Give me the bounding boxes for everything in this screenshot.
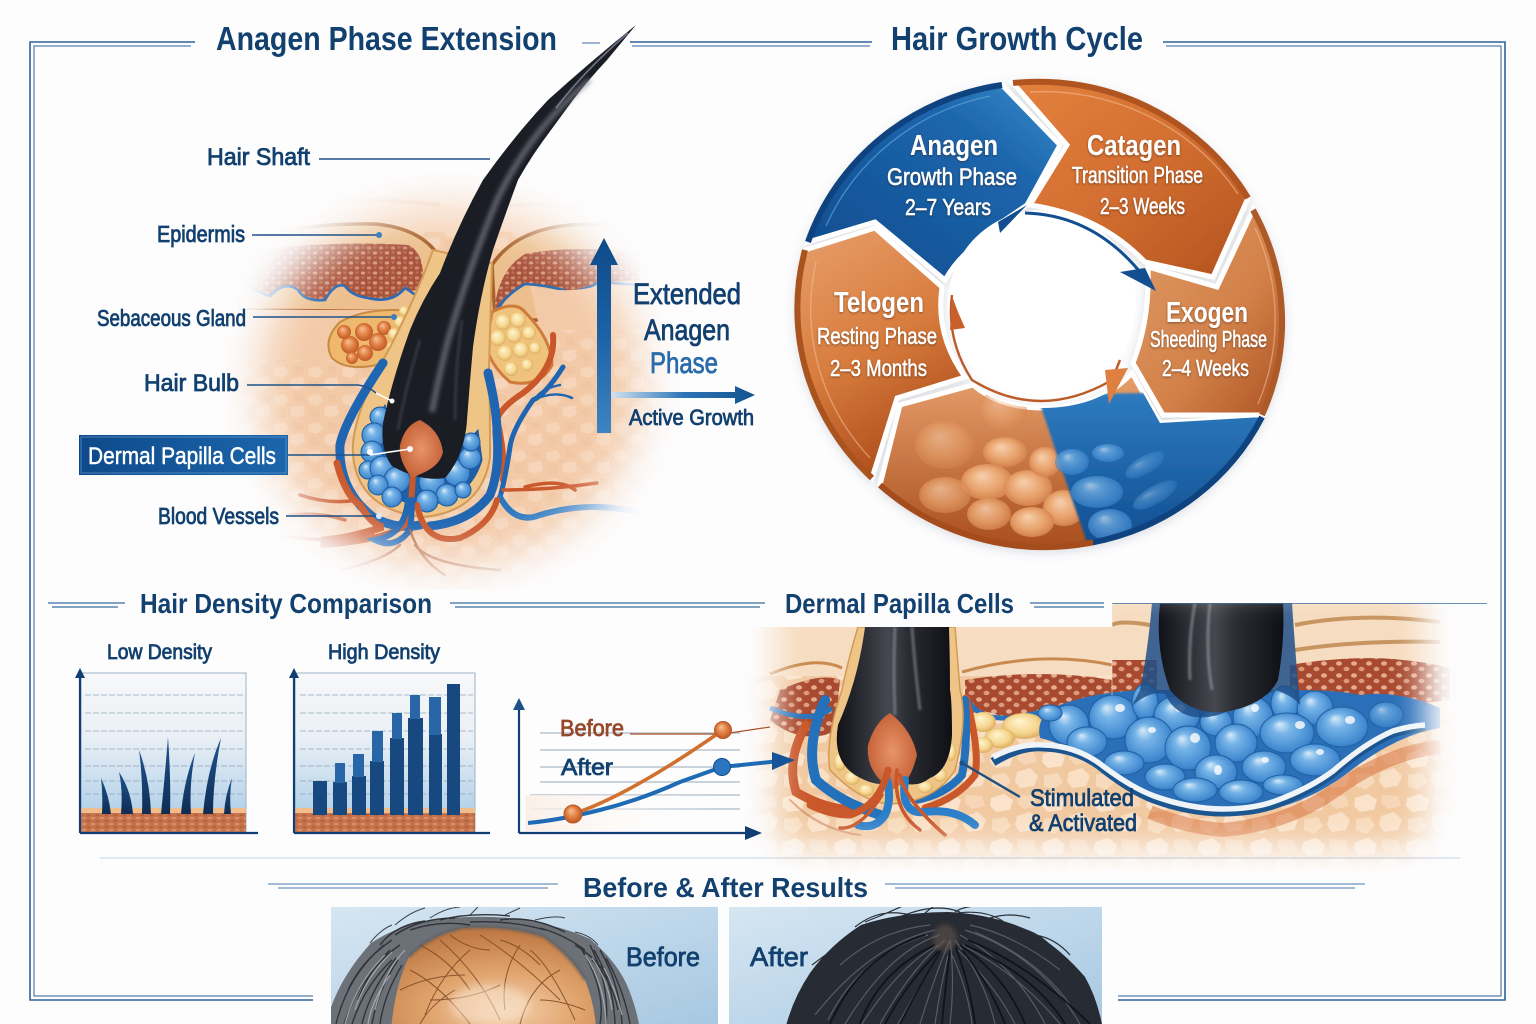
text: Exogen phase: Exogen <box>1166 297 1248 329</box>
text: Exogen phase: Sheeding Phase <box>1150 326 1267 352</box>
text: Exogen phase <box>1150 297 1267 381</box>
segment: Catagen <box>1013 82 1248 277</box>
text: Anagen phase <box>887 130 1017 220</box>
chart: before and after line chart <box>513 698 795 840</box>
left root strands <box>790 770 975 835</box>
chart: Low Density: Low Density <box>107 641 212 664</box>
text: Telogen phase <box>817 287 937 381</box>
text: Catagen phase: 2–3 Weeks <box>1100 193 1185 219</box>
photo: before <box>325 907 718 1024</box>
inner arrows <box>950 205 1156 404</box>
section heading: Before & After Results: Before & After Results <box>583 872 868 903</box>
chart: High Density: High Density <box>328 641 440 664</box>
arrow: active growth horizontal <box>612 386 755 404</box>
section heading: Hair Density Comparison: Hair Density Comparison <box>140 588 432 619</box>
ring outer rims <box>797 82 1282 547</box>
inset tissue lower <box>1150 747 1440 830</box>
text: Anagen phase: Growth Phase <box>887 164 1017 191</box>
ring centre <box>948 210 1136 398</box>
text: Extended Anagen Phase: Extended <box>633 278 741 311</box>
text: Telogen phase: Resting Phase <box>817 323 937 349</box>
blue cell field <box>1039 690 1440 815</box>
section heading: Before & After Results <box>268 872 1365 903</box>
inset tissue <box>1112 616 1449 705</box>
dermal papilla illustration <box>740 600 1500 870</box>
label: Before: Before <box>626 942 700 972</box>
segment: Telogen <box>797 228 965 478</box>
hair growth cycle ring <box>797 82 1300 560</box>
text: Anagen phase: Anagen <box>910 130 998 162</box>
text: Extended Anagen Phase: Phase <box>650 347 718 380</box>
head with thinning hair <box>325 907 640 1024</box>
inset hair shaft <box>1132 603 1300 717</box>
arrow: extended anagen vertical <box>590 238 618 433</box>
segment highlights <box>811 92 1275 458</box>
left follicle vessels <box>793 698 976 815</box>
density bars <box>313 684 460 815</box>
segment: Exogen <box>1133 210 1282 415</box>
label box: Dermal Papilla Cells <box>79 435 413 475</box>
label: Blood Vessels: Blood Vessels <box>158 503 279 529</box>
text: Catagen phase: Transition Phase <box>1072 162 1203 188</box>
chart: Low Density <box>75 641 258 833</box>
dermal papilla <box>400 420 443 478</box>
text: Anagen phase: 2–7 Years <box>905 194 991 220</box>
text: Catagen phase: Catagen <box>1087 130 1181 162</box>
label: Hair Bulb: Hair Bulb <box>144 370 239 397</box>
text: Telogen phase: 2–3 Months <box>830 355 927 381</box>
text: Telogen phase: Telogen <box>834 287 924 319</box>
label: After: After <box>750 942 808 972</box>
chart: before and after line chart: After <box>561 754 613 780</box>
vessels back <box>280 335 640 540</box>
chart: before and after line chart: Before <box>560 715 624 741</box>
photo: after <box>729 905 1103 1024</box>
hair follicle cross-section illustration <box>220 25 680 590</box>
label: Stimulated & Activated <box>960 760 1137 837</box>
sebaceous gland left <box>327 306 408 368</box>
text: Active Growth: Active Growth <box>629 405 754 430</box>
head with full hair <box>785 905 1103 1024</box>
title: Anagen Phase Extension: Anagen Phase Extension <box>216 20 557 57</box>
text: Extended Anagen Phase: Anagen <box>644 314 730 347</box>
left papilla <box>868 713 917 790</box>
basement membrane <box>993 727 1425 812</box>
label: Blood Vessels <box>158 503 382 529</box>
left follicle tissue <box>770 678 840 736</box>
low density hairs <box>101 737 232 814</box>
chart: High Density <box>289 641 490 833</box>
section heading: Dermal Papilla Cells: Dermal Papilla Cells <box>785 588 1014 619</box>
label: Stimulated & Activated: & Activated <box>1029 810 1137 837</box>
left follicle sheath <box>829 627 963 804</box>
label: Stimulated & Activated: Stimulated <box>1030 785 1134 812</box>
title: Hair Growth Cycle: Hair Growth Cycle <box>891 20 1143 57</box>
segment: bottom cell panel <box>880 373 1300 560</box>
label: Epidermis: Epidermis <box>157 221 245 247</box>
text: Exogen phase: 2–4 Weeks <box>1162 355 1249 381</box>
hair shaft <box>382 25 636 479</box>
text: Extended Anagen Phase <box>633 278 741 380</box>
root strands <box>323 470 500 575</box>
left hair shaft <box>837 627 952 785</box>
section heading: Hair Density Comparison <box>48 588 765 619</box>
blue dermal cells <box>359 405 482 512</box>
segment: Anagen <box>808 85 1060 280</box>
label box: Dermal Papilla Cells: Dermal Papilla Cells <box>88 443 276 470</box>
label: Hair Bulb <box>144 370 394 404</box>
text: Catagen phase <box>1072 130 1203 219</box>
label: Sebaceous Gland <box>97 305 397 331</box>
label: Hair Shaft: Hair Shaft <box>207 144 310 171</box>
label: Epidermis <box>157 221 382 247</box>
sebaceous gland right <box>486 306 552 383</box>
label: Sebaceous Gland: Sebaceous Gland <box>97 305 246 331</box>
follicle sheath <box>353 250 492 517</box>
